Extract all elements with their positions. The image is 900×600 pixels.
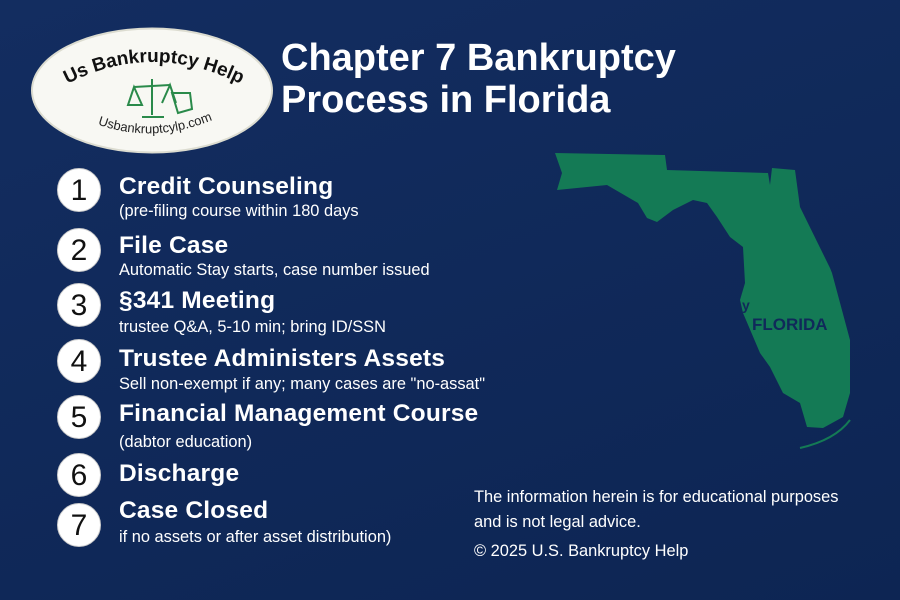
step 1 — [57, 168, 359, 220]
logo badge: Us Bankruptcy Help — [62, 50, 243, 84]
disclaimer: The information herein is for educational purposes — [474, 488, 838, 506]
step 3 — [57, 283, 386, 336]
step 1: Credit Counseling — [119, 173, 333, 200]
step 4: 4 — [71, 345, 87, 378]
logo badge — [31, 28, 273, 154]
step 4: Trustee Administers Assets — [119, 345, 445, 372]
step 1: 1 — [71, 174, 87, 207]
step 3: trustee Q&A, 5-10 min; bring ID/SSN — [119, 318, 386, 336]
step 5 — [57, 395, 478, 451]
title: Process in Florida — [281, 79, 610, 121]
step 7: Case Closed — [119, 497, 268, 524]
disclaimer: and is not legal advice. — [474, 513, 641, 531]
step 6: 6 — [71, 459, 87, 492]
florida map: FLORIDA — [752, 315, 828, 334]
step 4: Sell non-exempt if any; many cases are "no-assat" — [119, 375, 485, 393]
step 6 — [57, 453, 239, 497]
title: Chapter 7 Bankruptcy — [281, 37, 676, 79]
step 1: (pre-filing course within 180 days — [119, 202, 359, 220]
step 2 — [57, 228, 430, 279]
step 5: 5 — [71, 401, 87, 434]
step 2: 2 — [71, 234, 87, 267]
step 2: Automatic Stay starts, case number issued — [119, 261, 430, 279]
step 7 — [57, 497, 391, 547]
step 3: §341 Meeting — [119, 287, 275, 314]
disclaimer — [474, 488, 838, 531]
step 3: 3 — [71, 289, 87, 322]
step 7: if no assets or after asset distribution) — [119, 528, 391, 546]
logo badge: Usbankruptcylp.com — [99, 114, 212, 136]
step 6: Discharge — [119, 460, 239, 487]
florida map — [555, 153, 851, 449]
florida map: y — [742, 297, 750, 313]
copyright: © 2025 U.S. Bankruptcy Help — [474, 542, 688, 560]
step 5: (dabtor education) — [119, 433, 252, 451]
step 2: File Case — [119, 232, 228, 259]
step 7: 7 — [71, 509, 87, 542]
title — [281, 37, 676, 121]
step 4 — [57, 339, 485, 393]
step 5: Financial Management Course — [119, 400, 478, 427]
